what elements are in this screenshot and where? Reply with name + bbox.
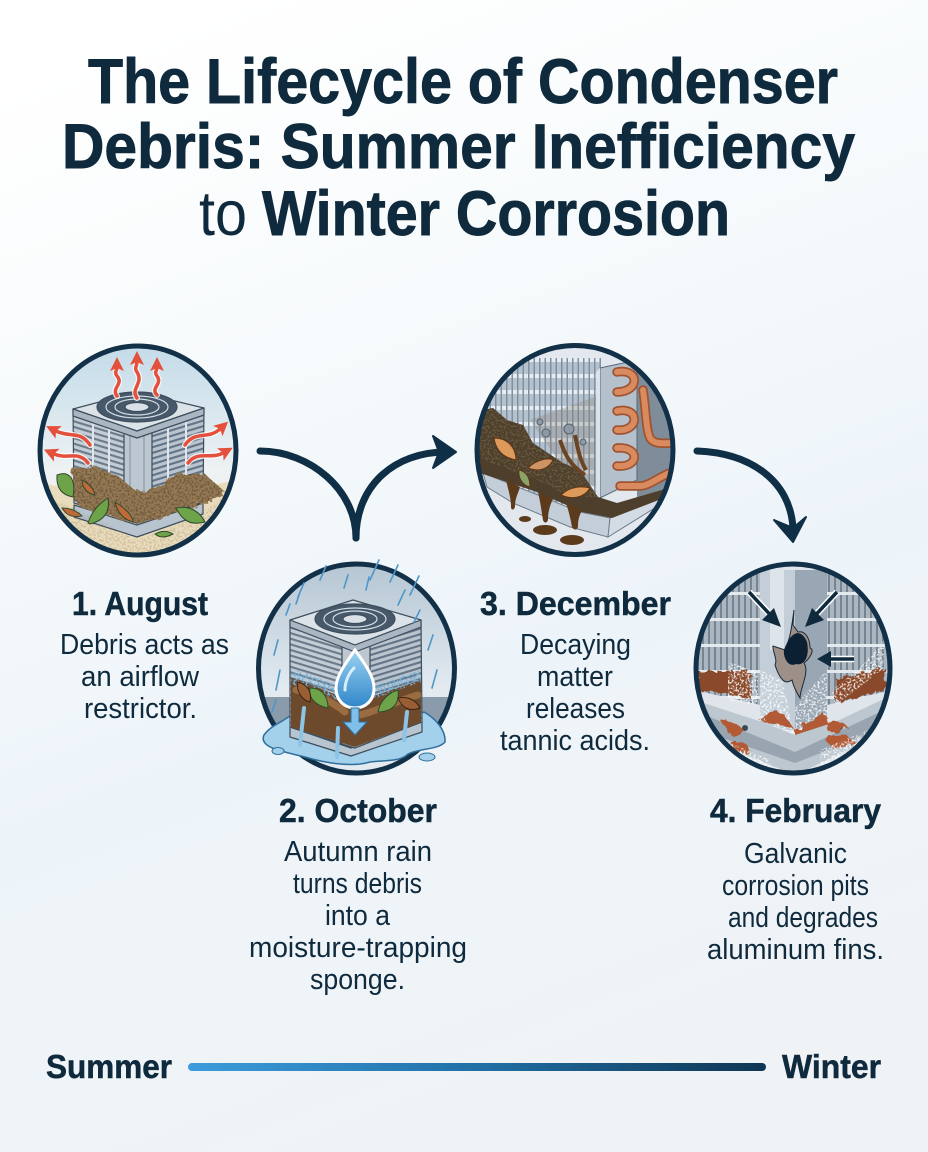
- step 4 text: corrosion pits: [722, 870, 869, 902]
- title: [62, 47, 855, 249]
- brown drips: [506, 480, 584, 545]
- step 1 text: restrictor.: [84, 693, 197, 725]
- timeline: Winter: [782, 1048, 881, 1085]
- step 4 text: 4. February: [710, 792, 882, 829]
- title: to: [199, 179, 247, 249]
- step 4 text: [707, 792, 884, 966]
- title: Debris: Summer Inefficiency: [62, 112, 855, 182]
- coil fins: [489, 358, 601, 512]
- step 4 text: Galvanic: [744, 838, 847, 870]
- timeline: [46, 1048, 881, 1085]
- step 2 text: sponge.: [310, 964, 405, 996]
- step 1 text: Debris acts as: [60, 629, 229, 661]
- step 3 text: 3. December: [480, 585, 671, 622]
- step 3 text: matter: [537, 661, 613, 693]
- step 2 text: into a: [325, 900, 390, 932]
- step 3 text: [480, 585, 671, 757]
- icon: condenser unit: [73, 392, 204, 537]
- title: Winter Corrosion: [262, 179, 730, 249]
- pitted hole: [773, 610, 812, 698]
- step 4 text: and degrades: [728, 902, 878, 934]
- panel: step 4 February illustration: [694, 562, 894, 780]
- base tray: [704, 700, 883, 770]
- step 2 text: 2. October: [279, 792, 437, 829]
- corroded fins: [694, 570, 760, 705]
- panel: step 1 August illustration: [38, 344, 238, 560]
- leaves: [494, 438, 590, 498]
- step 2 text: moisture-trapping: [249, 932, 467, 964]
- rust and salt on fins: [698, 640, 885, 706]
- arrow: August to October to December: [260, 436, 456, 538]
- step 1 text: an airflow: [81, 661, 199, 693]
- step 1 text: [60, 585, 229, 725]
- timeline: Summer: [46, 1048, 172, 1085]
- icon: water drop: [336, 650, 374, 735]
- bubbles: [537, 419, 586, 445]
- copper tubes: [617, 372, 682, 486]
- heat arrows: [54, 362, 223, 463]
- step 3 text: Decaying: [520, 629, 631, 661]
- panel: step 2 October illustration: [257, 560, 457, 777]
- arrow: December to February: [697, 451, 806, 542]
- corner post: [760, 570, 828, 738]
- leaves: [57, 474, 205, 537]
- decaying debris: [470, 408, 672, 518]
- step 3 text: releases: [526, 693, 625, 725]
- tray: [482, 474, 662, 538]
- step 1 text: 1. August: [72, 585, 208, 622]
- step 4 text: aluminum fins.: [707, 934, 884, 966]
- wet debris: [291, 668, 421, 757]
- corrosion arrows: [749, 592, 854, 667]
- puddle: [263, 712, 445, 765]
- step 3 text: tannic acids.: [500, 725, 650, 757]
- debris pile: [54, 465, 225, 552]
- step 2 text: Autumn rain: [284, 836, 432, 868]
- step 2 text: [249, 792, 467, 996]
- panel: step 3 December illustration: [470, 343, 682, 560]
- rain: [272, 560, 437, 712]
- icon: condenser unit: [290, 600, 422, 756]
- title: The Lifecycle of Condenser: [88, 47, 838, 117]
- coil plate: [596, 362, 670, 498]
- step 2 text: turns debris: [293, 868, 422, 900]
